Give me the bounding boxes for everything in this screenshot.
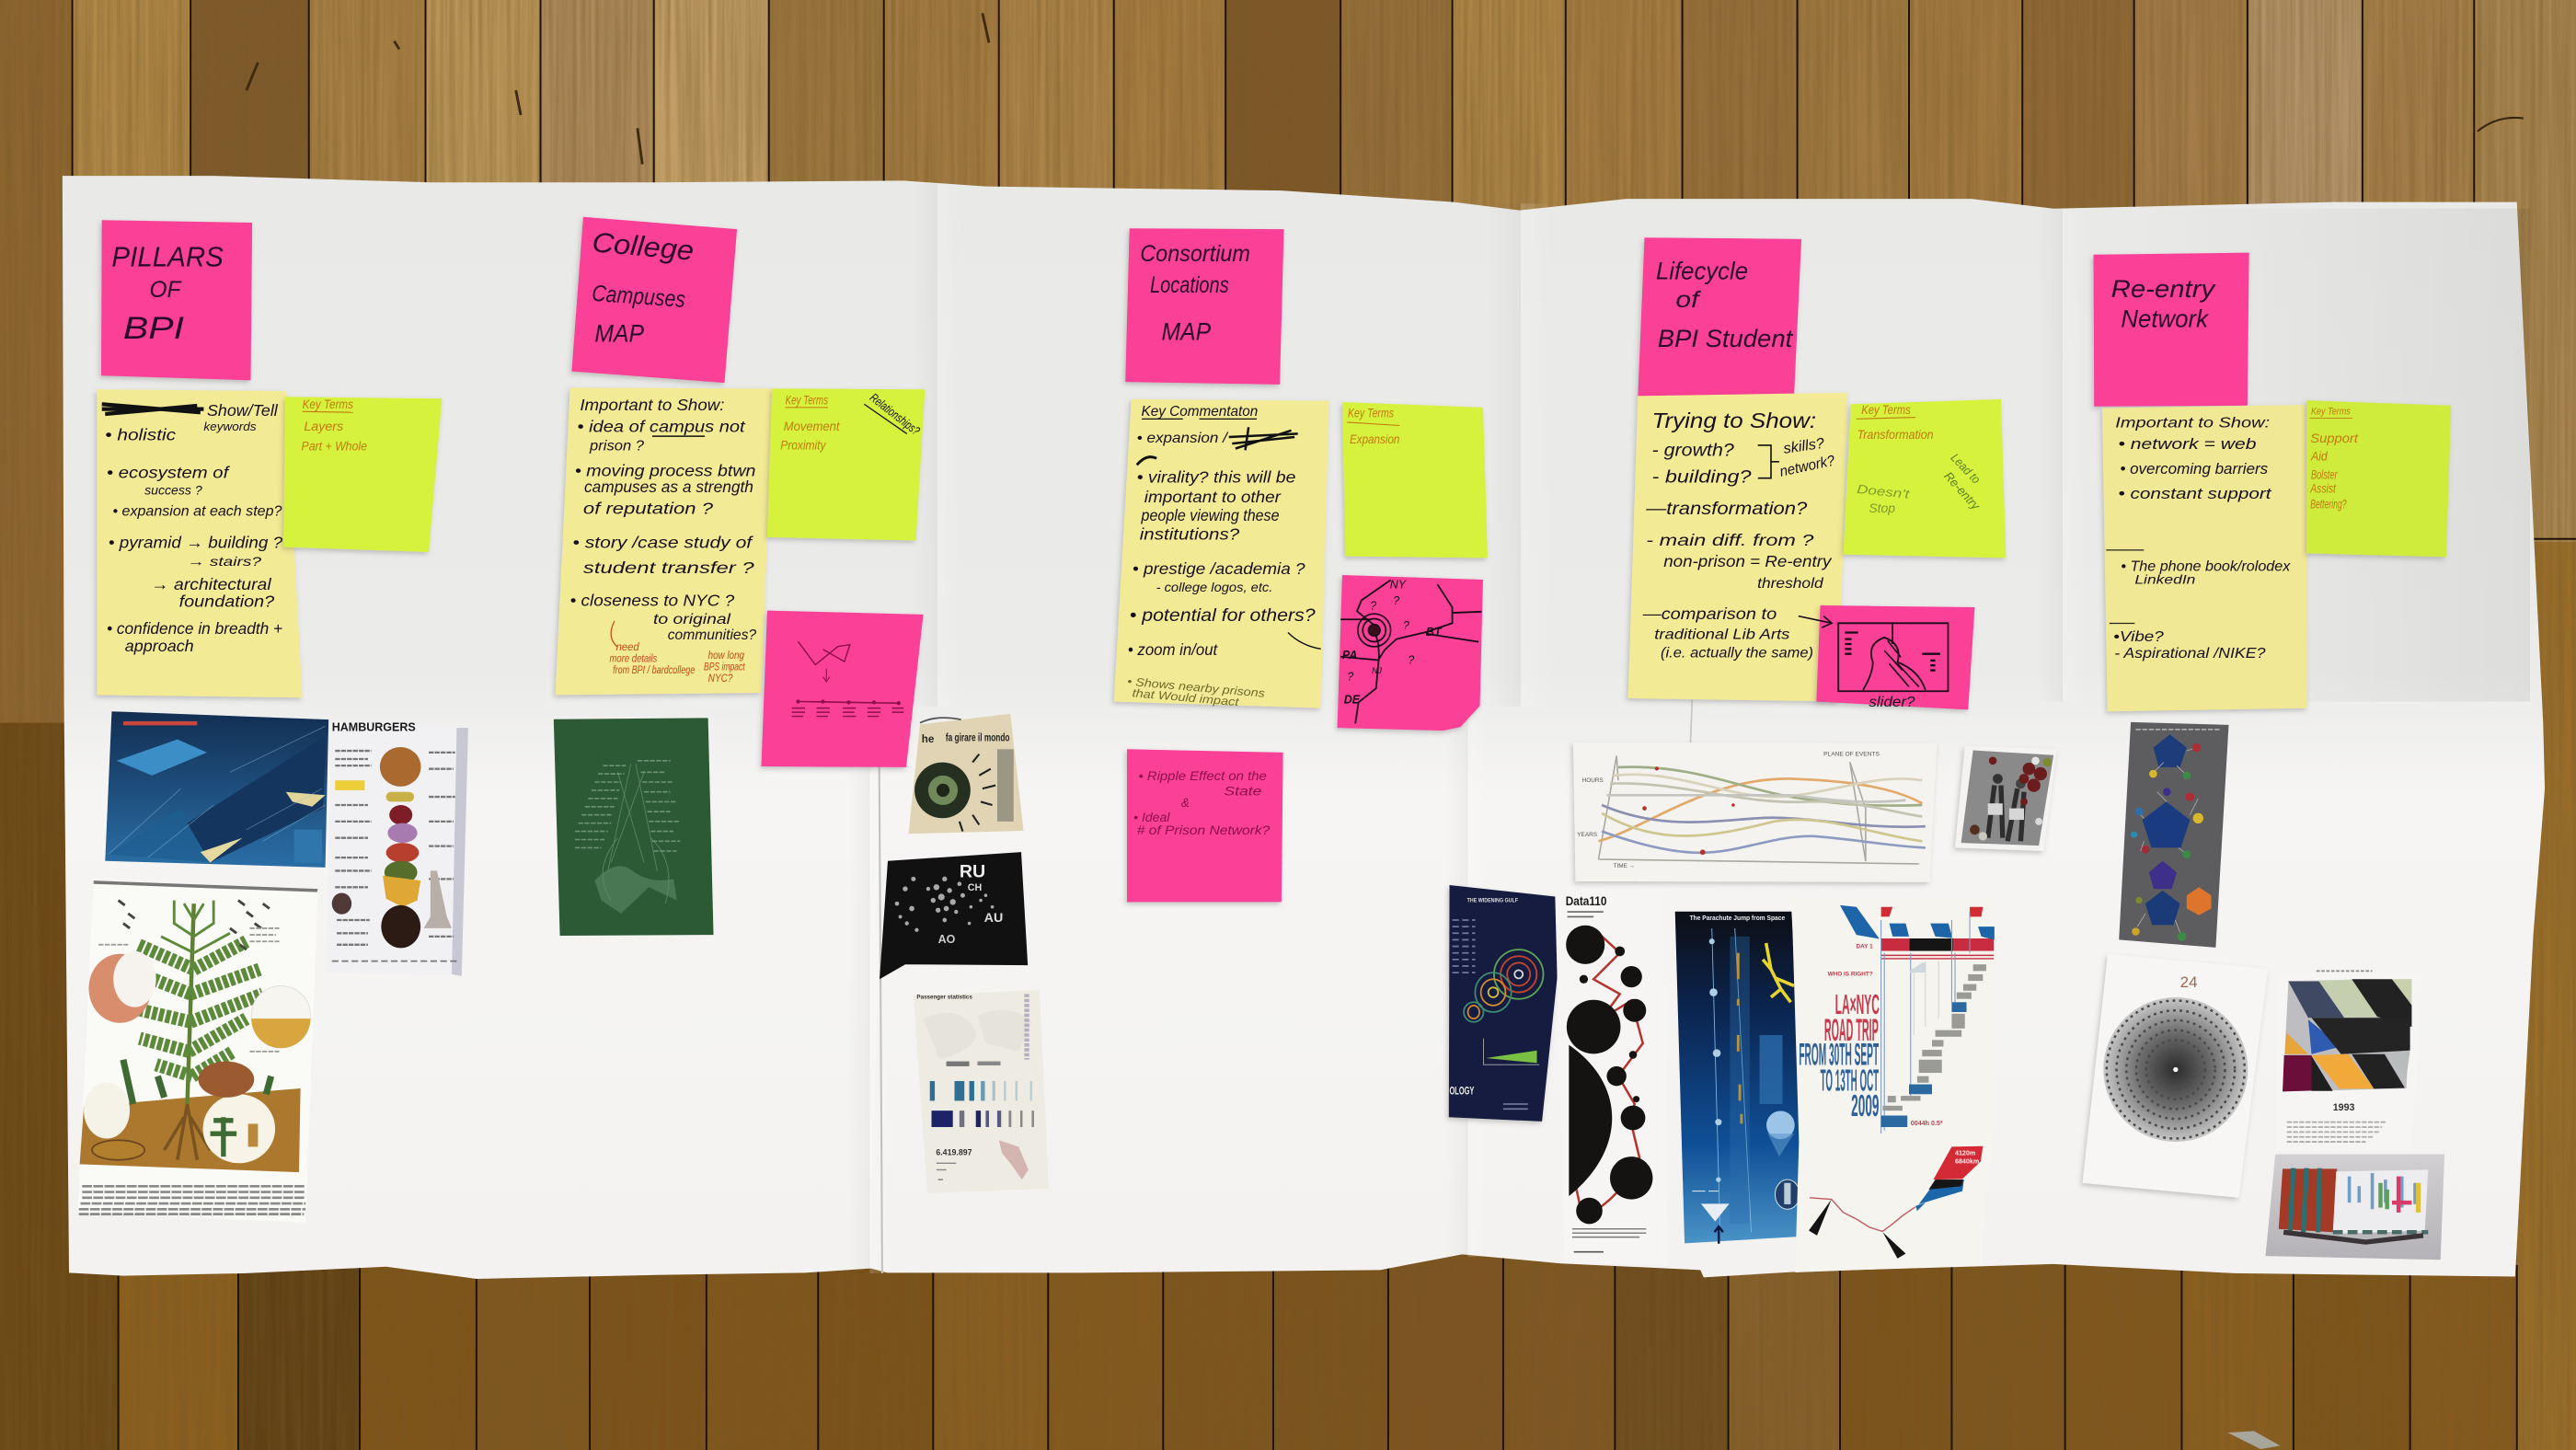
reference image: black world map: AU [984, 911, 1003, 926]
sketch note: regional map: DE [1344, 693, 1361, 706]
note: important to show: to original [653, 611, 730, 627]
note: what to show and tell: success ? [144, 484, 202, 499]
note: key terms [283, 397, 442, 552]
note: key terms [1844, 399, 2006, 558]
note: important to show: prison ? [589, 437, 644, 454]
note: what to show and tell: • expansion at each step? [112, 503, 282, 520]
note: trying to show: network? [1778, 453, 1836, 480]
title note: Re-entry Network: Network [2121, 305, 2210, 332]
note: key terms [1342, 402, 1488, 558]
title note: Lifecycle of BPI Student [1638, 237, 1801, 397]
reference image: LA to NYC road trip: LA×NYC [1835, 990, 1880, 1020]
note: important to show: more details [609, 653, 657, 665]
note: key terms [2306, 400, 2451, 557]
note: key terms: Movement [784, 420, 841, 433]
note: key terms: Doesn't [1857, 482, 1912, 501]
reference image: the widening gulf [1449, 885, 1566, 1122]
note: important to show: - Aspirational /NIKE? [2114, 645, 2266, 662]
note: what to show and tell: • pyramid → building ? [109, 534, 282, 552]
note: key commentaton: important to other [1144, 488, 1282, 506]
reference image: hamburgers poster [327, 721, 468, 976]
note: important to show [556, 387, 773, 695]
note: key terms: Layers [304, 420, 344, 433]
note: key commentaton: • Shows nearby prisons [1127, 675, 1265, 700]
reference image: Data110 poster: Data110 [1566, 894, 1606, 909]
sketch note: regional map: NJ [1372, 666, 1383, 675]
reference image: the widening gulf: THE WIDENING GULF [1467, 897, 1518, 903]
note: important to show: Important to Show: [2115, 414, 2270, 431]
title note: Pillars of BPI: BPI [123, 311, 185, 346]
note: trying to show: —comparison to [1642, 604, 1777, 623]
reference image: green radial poster [554, 718, 714, 936]
title note: College Campuses Map: College [591, 227, 695, 267]
sketch note: network to timeline [762, 611, 924, 767]
note: important to show: how long [708, 650, 744, 662]
note: key commentaton [1114, 399, 1329, 708]
note: ripple effect: • Ideal [1133, 811, 1171, 824]
note: what to show and tell: • confidence in breadth + [107, 619, 282, 638]
panel: Consortium Locations Map [880, 228, 1488, 1193]
reference image: world map with bars: 6.419.897 [936, 1147, 972, 1157]
reference image: abstract geometric composition [2275, 971, 2421, 1150]
note: key terms: Proximity [780, 438, 827, 452]
note: trying to show: - growth? [1652, 441, 1734, 461]
title note: Pillars of BPI: PILLARS [111, 242, 224, 272]
title note: Lifecycle of BPI Student: of [1675, 287, 1702, 313]
title note: College Campuses Map: Campuses [591, 281, 686, 313]
title note: College Campuses Map [571, 217, 737, 383]
reference image: black world map: CH [968, 882, 983, 893]
note: important to show: student transfer ? [583, 558, 754, 577]
note: key commentaton: Key Commentaton [1142, 403, 1258, 420]
reference image: fanned books [2265, 1154, 2444, 1260]
note: important to show: BPS impact [704, 662, 745, 673]
sketch note: regional map: NY [1390, 578, 1408, 591]
note: key terms: Key Terms [1861, 403, 1911, 417]
reference image: plane of events line chart: YEARS [1577, 832, 1597, 838]
note: important to show: NYC? [708, 673, 733, 685]
note: key commentaton: people viewing these [1141, 506, 1280, 524]
sketch note: slider [1816, 605, 1974, 710]
note: important to show: • constant support [2119, 485, 2272, 502]
title note: Consortium Locations Map: MAP [1161, 318, 1211, 346]
title note: Pillars of BPI [101, 220, 252, 380]
note: important to show [2102, 405, 2307, 711]
flag: distance total: 4120m [1955, 1149, 1975, 1157]
note: key terms: Aid [2310, 450, 2328, 464]
note: trying to show: threshold [1757, 575, 1824, 592]
reference image: tree poster [77, 880, 318, 1223]
note: ripple effect [1127, 749, 1283, 902]
reference image: LA to NYC road trip: TO 13TH OCT [1821, 1064, 1879, 1098]
reference image: LA to NYC road trip: 0044h 0.5* [1911, 1120, 1943, 1127]
note: trying to show: —transformation? [1645, 499, 1807, 519]
reference image: the parachute jump from space [1675, 912, 1810, 1244]
note: key commentaton: • prestige /academia ? [1133, 559, 1305, 578]
note: trying to show: - main diff. from ? [1646, 531, 1814, 549]
note: ripple effect: # of Prison Network? [1137, 823, 1271, 837]
note: key terms: Expansion [1350, 432, 1399, 446]
title note: Pillars of BPI: OF [149, 277, 182, 303]
sketch note: regional map: ? [1347, 670, 1353, 683]
note: ripple effect: & [1181, 796, 1190, 810]
reference image: LA to NYC road trip: ROAD TRIP [1824, 1013, 1879, 1048]
note: key terms: Bettering? [2310, 497, 2347, 511]
note: key terms: Key Terms [303, 397, 353, 411]
note: key commentaton: • zoom in/out [1128, 640, 1218, 659]
note: key terms: Key Terms [1348, 407, 1394, 420]
flag: distance total [1933, 1146, 1983, 1180]
reference image: the parachute jump from space: The Parachute Jump from Space [1690, 914, 1785, 922]
reference image: couple photo with fruit [1955, 746, 2057, 851]
reference image: newspaper clipping: fa girare il mondo [946, 731, 1009, 743]
note: important to show: •Vibe? [2113, 628, 2164, 645]
note: trying to show: skills? [1782, 435, 1825, 457]
note: key terms: Relationships? [868, 390, 923, 438]
note: ripple effect: • Ripple Effect on the [1139, 769, 1267, 783]
sketch note: regional map [1338, 575, 1483, 731]
panel: Pillars of BPI [77, 220, 468, 1223]
note: trying to show: non-prison = Re-entry [1663, 552, 1832, 570]
note: what to show and tell: approach [125, 637, 194, 655]
note: trying to show: Trying to Show: [1652, 409, 1816, 432]
note: key terms [767, 388, 925, 541]
reference image: the widening gulf: OLOGY [1450, 1085, 1474, 1097]
reference image: blue transit map [105, 711, 328, 868]
note: trying to show [1628, 393, 1847, 701]
note: key terms: Transformation [1857, 428, 1934, 442]
sketch note: regional map: ? [1403, 619, 1409, 632]
reference image: black world map [880, 852, 1028, 979]
sketch note: regional map: ? [1370, 599, 1376, 612]
title note: Lifecycle of BPI Student: BPI Student [1658, 325, 1794, 352]
note: what to show and tell: Show/Tell [207, 401, 279, 420]
flag: distance total: 6840km [1955, 1157, 1979, 1165]
reference image: LA to NYC road trip: DAY 1 [1857, 943, 1873, 949]
note: important to show: • idea of campus not [577, 418, 746, 436]
reference image: Data110 poster [1555, 889, 1667, 1265]
reference image: plane of events line chart: HOURS [1582, 777, 1604, 784]
note: important to show: need [616, 641, 639, 653]
note: key terms: Stop [1869, 501, 1895, 515]
title note: Consortium Locations Map: Locations [1150, 272, 1229, 298]
note: what to show and tell: → stairs? [188, 555, 261, 570]
reference image: world map with bars [914, 990, 1049, 1193]
note: key commentaton: that Would impact [1132, 686, 1240, 708]
note: key terms: Bolster [2311, 467, 2338, 481]
note: key commentaton: • virality? this will be [1137, 467, 1295, 486]
sketch note: regional map: ? [1393, 594, 1399, 607]
note: key commentaton: • potential for others? [1130, 605, 1316, 626]
note: key terms: Re-entry [1941, 469, 1984, 513]
sketch note: slider: slider? [1869, 694, 1915, 710]
note: important to show: • story /case study of [573, 534, 754, 552]
reference image: LA to NYC road trip [1791, 898, 1995, 1272]
reference image: black world map: AO [938, 933, 956, 946]
note: key terms: Support [2310, 432, 2359, 445]
note: important to show: Important to Show: [580, 396, 725, 414]
note: ripple effect: State [1224, 784, 1261, 798]
reference image: newspaper clipping [909, 714, 1023, 834]
note: what to show and tell: → architectural [151, 575, 272, 593]
note: important to show: • overcoming barriers [2120, 460, 2269, 478]
note: key terms: Key Terms [786, 393, 828, 407]
note: key commentaton: institutions? [1140, 525, 1239, 544]
sketch note: regional map: ? [1408, 653, 1414, 666]
note: important to show: communities? [668, 627, 756, 643]
reference image: world map with bars: Passenger statistics [916, 995, 972, 1001]
panel: College Campuses Map [554, 217, 925, 936]
note: important to show: • closeness to NYC ? [570, 591, 734, 609]
title note: Re-entry Network [2094, 253, 2249, 407]
note: what to show and tell: • ecosystem of [107, 464, 231, 482]
title note: Lifecycle of BPI Student: Lifecycle [1656, 258, 1748, 285]
note: important to show: from BPI / bardcollege [613, 664, 696, 676]
reference image: plane of events line chart: PLANE OF EVENTS [1823, 751, 1880, 757]
reference image: newspaper clipping: he [922, 733, 935, 745]
note: important to show: • network = web [2119, 435, 2257, 453]
note: what to show and tell: foundation? [179, 593, 274, 611]
reference image: concentric circle poster 24: 24 [2180, 973, 2198, 991]
reference image: plane of events line chart [1573, 742, 1937, 882]
title note: Consortium Locations Map [1125, 228, 1284, 385]
note: key terms: Assist [2309, 482, 2337, 496]
reference image: hamburgers poster: HAMBURGERS [332, 721, 416, 734]
note: trying to show: traditional Lib Arts [1654, 627, 1789, 643]
note: important to show: • moving process btwn [575, 461, 756, 479]
sketch note: regional map: BT [1426, 626, 1443, 639]
title note: College Campuses Map: MAP [594, 319, 644, 347]
note: trying to show: (i.e. actually the same) [1661, 644, 1813, 661]
reference image: black world map: RU [960, 862, 985, 882]
note: what to show and tell: • holistic [105, 426, 176, 444]
note: key terms: Lead to [1948, 451, 1984, 487]
reference image: pentagon network [2119, 722, 2228, 948]
reference image: abstract geometric composition: 1993 [2333, 1102, 2355, 1113]
note: key terms: Key Terms [2311, 407, 2351, 418]
note: important to show: of reputation ? [583, 500, 713, 518]
arrow: comparison to sketch [1799, 616, 1832, 627]
title note: Consortium Locations Map: Consortium [1140, 241, 1250, 267]
reference image: LA to NYC road trip: WHO IS RIGHT? [1828, 972, 1873, 978]
reference image: LA to NYC road trip: 2009 [1851, 1088, 1880, 1122]
reference image: LA to NYC road trip: FROM 30TH SEPT [1799, 1038, 1879, 1073]
title note: Re-entry Network: Re-entry [2111, 275, 2216, 303]
note: key terms: Part + Whole [301, 439, 367, 453]
sketch note: regional map: PA [1342, 649, 1357, 662]
note: what to show and tell [97, 389, 303, 697]
note: important to show: LinkedIn [2134, 573, 2195, 587]
note: important to show: campuses as a strength [584, 478, 753, 496]
note: important to show: • The phone book/rolodex [2121, 558, 2291, 574]
note: trying to show: - building? [1652, 466, 1752, 487]
reference image: plane of events line chart: TIME → [1614, 863, 1635, 869]
panel: Lifecycle of BPI Student [1449, 237, 2057, 1272]
note: what to show and tell: keywords [203, 420, 257, 433]
note: key commentaton: • expansion / [1137, 430, 1229, 446]
panel: Re-entry Network [2083, 253, 2451, 1260]
note: key commentaton: - college logos, etc. [1156, 581, 1272, 594]
paper sheet background [63, 176, 2545, 1279]
reference image: concentric circle poster 24 [2083, 954, 2268, 1198]
